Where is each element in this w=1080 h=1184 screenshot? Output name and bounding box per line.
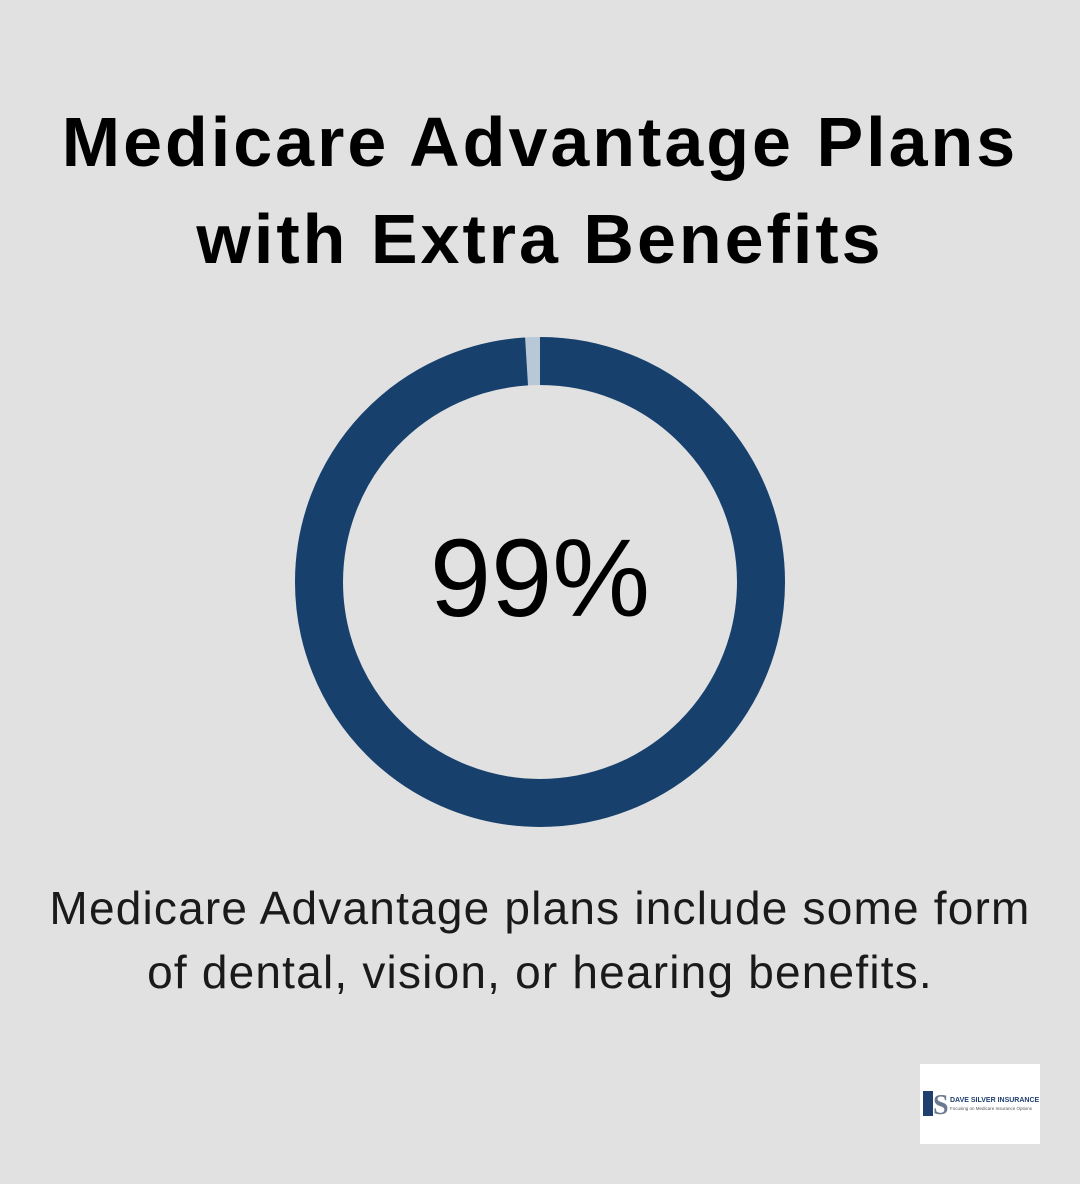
logo <box>920 1064 1040 1144</box>
title: with Extra Benefits <box>196 200 884 278</box>
description text: of dental, vision, or hearing benefits. <box>147 946 933 998</box>
title: Medicare Advantage Plans <box>62 103 1018 181</box>
logo: Focusing on Medicare Insurance Options <box>950 1106 1033 1111</box>
ring value 99% <box>319 361 761 803</box>
title <box>62 103 1018 278</box>
description text <box>49 882 1031 998</box>
logo: S <box>933 1090 949 1121</box>
percentage label: 99% <box>430 517 650 640</box>
ring background segment <box>319 361 761 803</box>
description text: Medicare Advantage plans include some form <box>49 882 1031 934</box>
logo: DAVE SILVER INSURANCE <box>950 1097 1040 1104</box>
